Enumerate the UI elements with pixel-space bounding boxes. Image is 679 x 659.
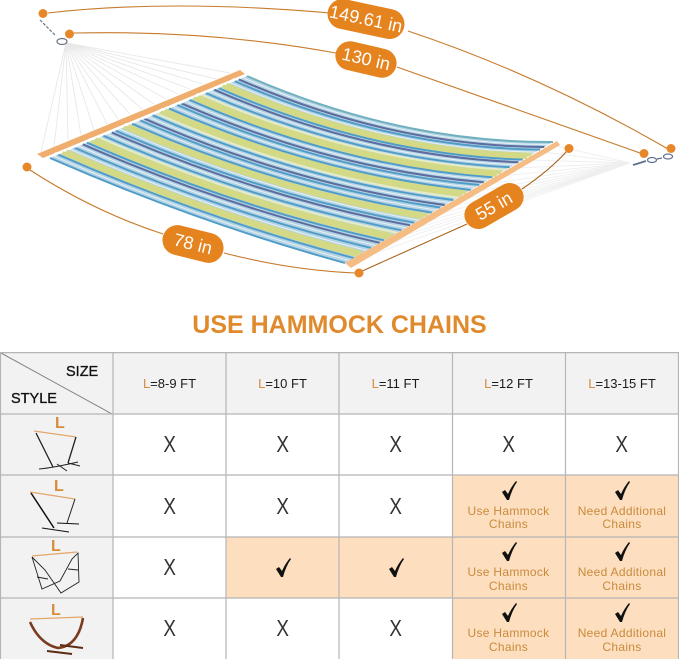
row 3 style icon: foldable stand	[0, 537, 113, 598]
row 4 13-15 ft: need additional chains: Need Additional	[578, 626, 666, 640]
dimension line: 130 in	[74, 33, 640, 153]
row 3 12 ft: use hammock chains	[452, 537, 565, 598]
compatibility table: X	[276, 431, 289, 457]
header: 8-9 ft: L=8-9 FT	[143, 376, 196, 390]
row 3 10 ft: check	[226, 537, 339, 598]
row 2 style icon: black stand	[0, 475, 113, 537]
header: size / style corner	[0, 352, 113, 414]
left chain	[40, 20, 67, 44]
row 1 style icon: steel stand: L	[55, 415, 65, 432]
row 2 12 ft: use hammock chains: Use Hammock	[468, 504, 549, 518]
header: 11 ft	[339, 352, 452, 414]
row 3 values	[113, 537, 226, 598]
row 4 values: X	[163, 615, 176, 641]
row 3 values: X	[163, 554, 176, 580]
compatibility table: X	[616, 431, 628, 457]
dimension end dots	[22, 9, 676, 278]
row 2 values: X	[163, 492, 176, 518]
row 4 values	[113, 598, 226, 659]
label: 78 in: 78 in	[172, 229, 214, 258]
compatibility table: X	[276, 615, 289, 641]
row 1 values: X	[163, 431, 176, 457]
header: 10 ft: L=10 FT	[258, 376, 307, 390]
row 3 12 ft: use hammock chains: Use Hammock	[468, 565, 549, 579]
header: 12 ft	[452, 352, 565, 414]
header: size / style corner: STYLE	[11, 391, 57, 407]
row 4 13-15 ft: need additional chains: Chains	[602, 640, 642, 654]
row 4 12 ft: use hammock chains: Use Hammock	[468, 626, 549, 640]
label: 55 in	[459, 178, 529, 234]
row 3 13-15 ft: need additional chains: Chains	[602, 578, 642, 592]
header: 13-15 ft	[565, 352, 679, 414]
row 3 11 ft: check	[339, 537, 452, 598]
row 3 style icon: foldable stand: L	[51, 538, 61, 555]
row 4 12 ft: use hammock chains	[452, 598, 565, 659]
compatibility table: X	[389, 492, 402, 518]
row 4 13-15 ft: need additional chains	[565, 598, 679, 659]
header: 8-9 ft	[113, 352, 226, 414]
row 2 12 ft: use hammock chains: Chains	[489, 517, 528, 531]
header: size / style corner: SIZE	[66, 364, 98, 380]
right spreader ropes	[362, 146, 630, 258]
label: 78 in	[159, 222, 227, 266]
row 2 13-15 ft: need additional chains	[565, 475, 679, 537]
compatibility table: X	[389, 431, 402, 457]
dimension line: 149.61 in	[48, 6, 668, 149]
header: 13-15 ft: L=13-15 FT	[588, 376, 656, 390]
row 4 12 ft: use hammock chains: Chains	[489, 640, 528, 654]
label: 130 in: 130 in	[340, 44, 392, 74]
dimension line: 55 in	[360, 150, 568, 272]
row 3 13-15 ft: need additional chains: Need Additional	[578, 565, 666, 579]
header: 11 ft: L=11 FT	[372, 376, 419, 390]
dimension line: 78 in	[30, 170, 355, 273]
row 2 13-15 ft: need additional chains: Need Additional	[578, 504, 666, 518]
row 1 style icon: steel stand	[0, 414, 113, 475]
label: 149.61 in: 149.61 in	[328, 1, 404, 36]
left wooden spreader bar	[37, 70, 245, 158]
row 3 13-15 ft: need additional chains	[565, 537, 679, 598]
hammock illustration with dimension lines	[22, 6, 676, 278]
row 1 values	[113, 414, 226, 475]
right chain	[633, 154, 672, 165]
row 2 values	[113, 475, 226, 537]
striped hammock fabric	[50, 76, 553, 263]
title: USE HAMMOCK CHAINS	[192, 311, 487, 339]
compatibility table	[0, 352, 679, 659]
row 2 13-15 ft: need additional chains: Chains	[602, 517, 642, 531]
compatibility table: X	[502, 431, 515, 457]
header: 12 ft: L=12 FT	[484, 376, 533, 390]
label: 130 in	[333, 38, 399, 81]
row 3 12 ft: use hammock chains: Chains	[489, 578, 528, 592]
header: 10 ft	[226, 352, 339, 414]
row 2 12 ft: use hammock chains	[452, 475, 565, 537]
row 4 style icon: wooden arc stand: L	[51, 602, 61, 619]
label: 55 in: 55 in	[472, 187, 516, 224]
left spreader ropes	[41, 43, 230, 152]
row 4 style icon: wooden arc stand	[0, 598, 113, 659]
right wooden spreader bar	[345, 141, 560, 268]
compatibility table: X	[389, 615, 402, 641]
compatibility table: X	[276, 492, 289, 518]
row 2 style icon: black stand: L	[54, 478, 64, 495]
